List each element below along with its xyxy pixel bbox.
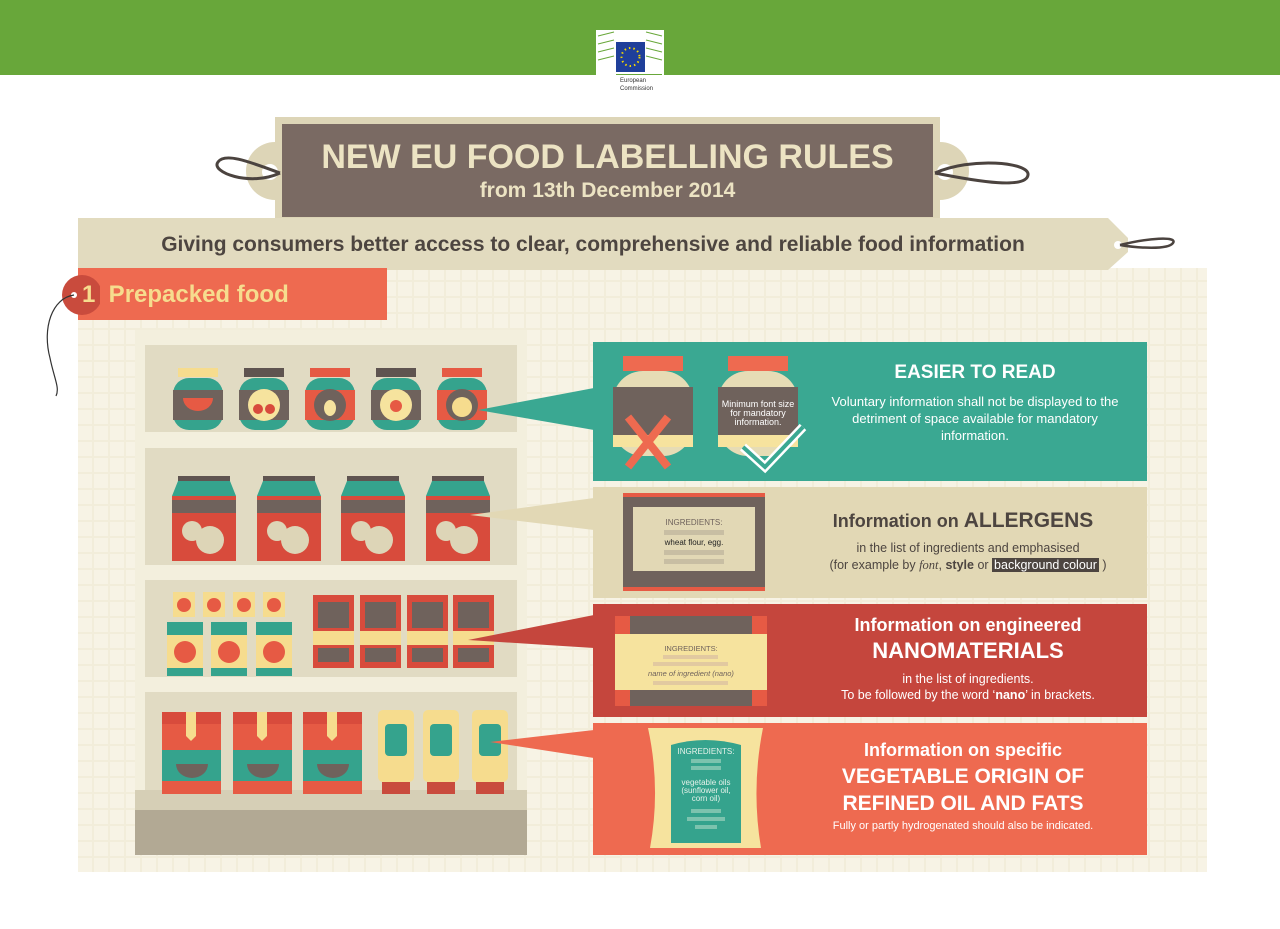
panel: nanomaterials xyxy=(593,604,1147,717)
section tab: prepacked food: 1 Prepacked food xyxy=(82,281,289,308)
shelf row 1: jars xyxy=(173,368,487,430)
panel: allergens: (for example by font, style or background colour ) xyxy=(829,558,1107,572)
header bar xyxy=(0,0,1280,75)
icon: jars with cross and check xyxy=(613,356,806,474)
panel: allergens: Information on ALLERGENS xyxy=(833,509,1093,532)
panel: easier to read: Voluntary information shall not be displayed to the detriment of space available for mandatory information. xyxy=(832,394,1118,443)
subtitle band: Giving consumers better access to clear, comprehensive and reliable food information xyxy=(161,233,1025,256)
panel: nanomaterials: NANOMATERIALS xyxy=(872,638,1064,663)
subtitle band xyxy=(78,218,1175,270)
panel: allergens xyxy=(593,487,1147,598)
icon: oil bottle label: corn oil) xyxy=(692,794,721,803)
panel: vegetable oils: VEGETABLE ORIGIN OF xyxy=(842,765,1084,788)
background pattern area xyxy=(78,268,1207,872)
arrow: callout to nanomaterials xyxy=(468,615,593,648)
icon: oil bottle label xyxy=(648,728,763,848)
title text: from 13th December 2014 xyxy=(480,179,735,202)
icon: nano ingredient pack xyxy=(615,616,767,706)
title text xyxy=(321,138,894,202)
shelf row 3: cans and packs xyxy=(167,592,494,676)
logo: European Commission: Commission xyxy=(620,86,653,92)
panel: allergens: in the list of ingredients and emphasised xyxy=(856,541,1080,555)
shelf illustration xyxy=(135,345,527,855)
title text: NEW EU FOOD LABELLING RULES xyxy=(321,138,894,176)
logo: European Commission xyxy=(596,30,664,92)
icon: oil bottle label: (sunflower oil, xyxy=(681,786,731,795)
panel: vegetable oils: REFINED OIL AND FATS xyxy=(842,792,1084,815)
arrow: callout to allergens xyxy=(470,498,593,530)
panel: nanomaterials: Information on engineered xyxy=(854,615,1082,635)
panel: vegetable oils: Fully or partly hydrogenated should also be indicated. xyxy=(833,820,1093,832)
arrow: callout to vegetable oil xyxy=(490,730,593,758)
panel: easier to read: EASIER TO READ xyxy=(894,362,1056,383)
icon: jars with cross and check: Minimum font size xyxy=(722,399,794,409)
icon: oil bottle label: vegetable oils xyxy=(682,778,730,787)
icon: ingredient label: wheat flour, egg. xyxy=(664,538,723,547)
icon: ingredient label xyxy=(623,493,765,591)
title tag xyxy=(215,117,1030,218)
icon: nano ingredient pack: INGREDIENTS: xyxy=(664,644,718,653)
shelf row 4: cereal boxes and bottles xyxy=(162,710,508,794)
shelf row 2: cookie boxes xyxy=(172,476,490,561)
panel: nanomaterials: in the list of ingredients. xyxy=(902,672,1034,686)
logo: European Commission: European xyxy=(620,78,646,84)
icon: jars with cross and check: information. xyxy=(734,417,782,427)
icon: nano ingredient pack: name of ingredient (nano) xyxy=(648,669,734,678)
icon: jars with cross and check: for mandatory xyxy=(730,408,786,418)
panel: vegetable oils: Information on specific xyxy=(864,740,1062,760)
panel: vegetable oils xyxy=(593,723,1147,855)
section tab: prepacked food xyxy=(46,268,387,396)
icon: ingredient label: INGREDIENTS: xyxy=(666,518,722,527)
icon: oil bottle label: INGREDIENTS: xyxy=(678,747,734,756)
panel: easier to read xyxy=(593,342,1147,481)
arrow: callout to easier to read xyxy=(478,388,593,430)
panel: nanomaterials: To be followed by the word ‘nano’ in brackets. xyxy=(841,688,1095,702)
